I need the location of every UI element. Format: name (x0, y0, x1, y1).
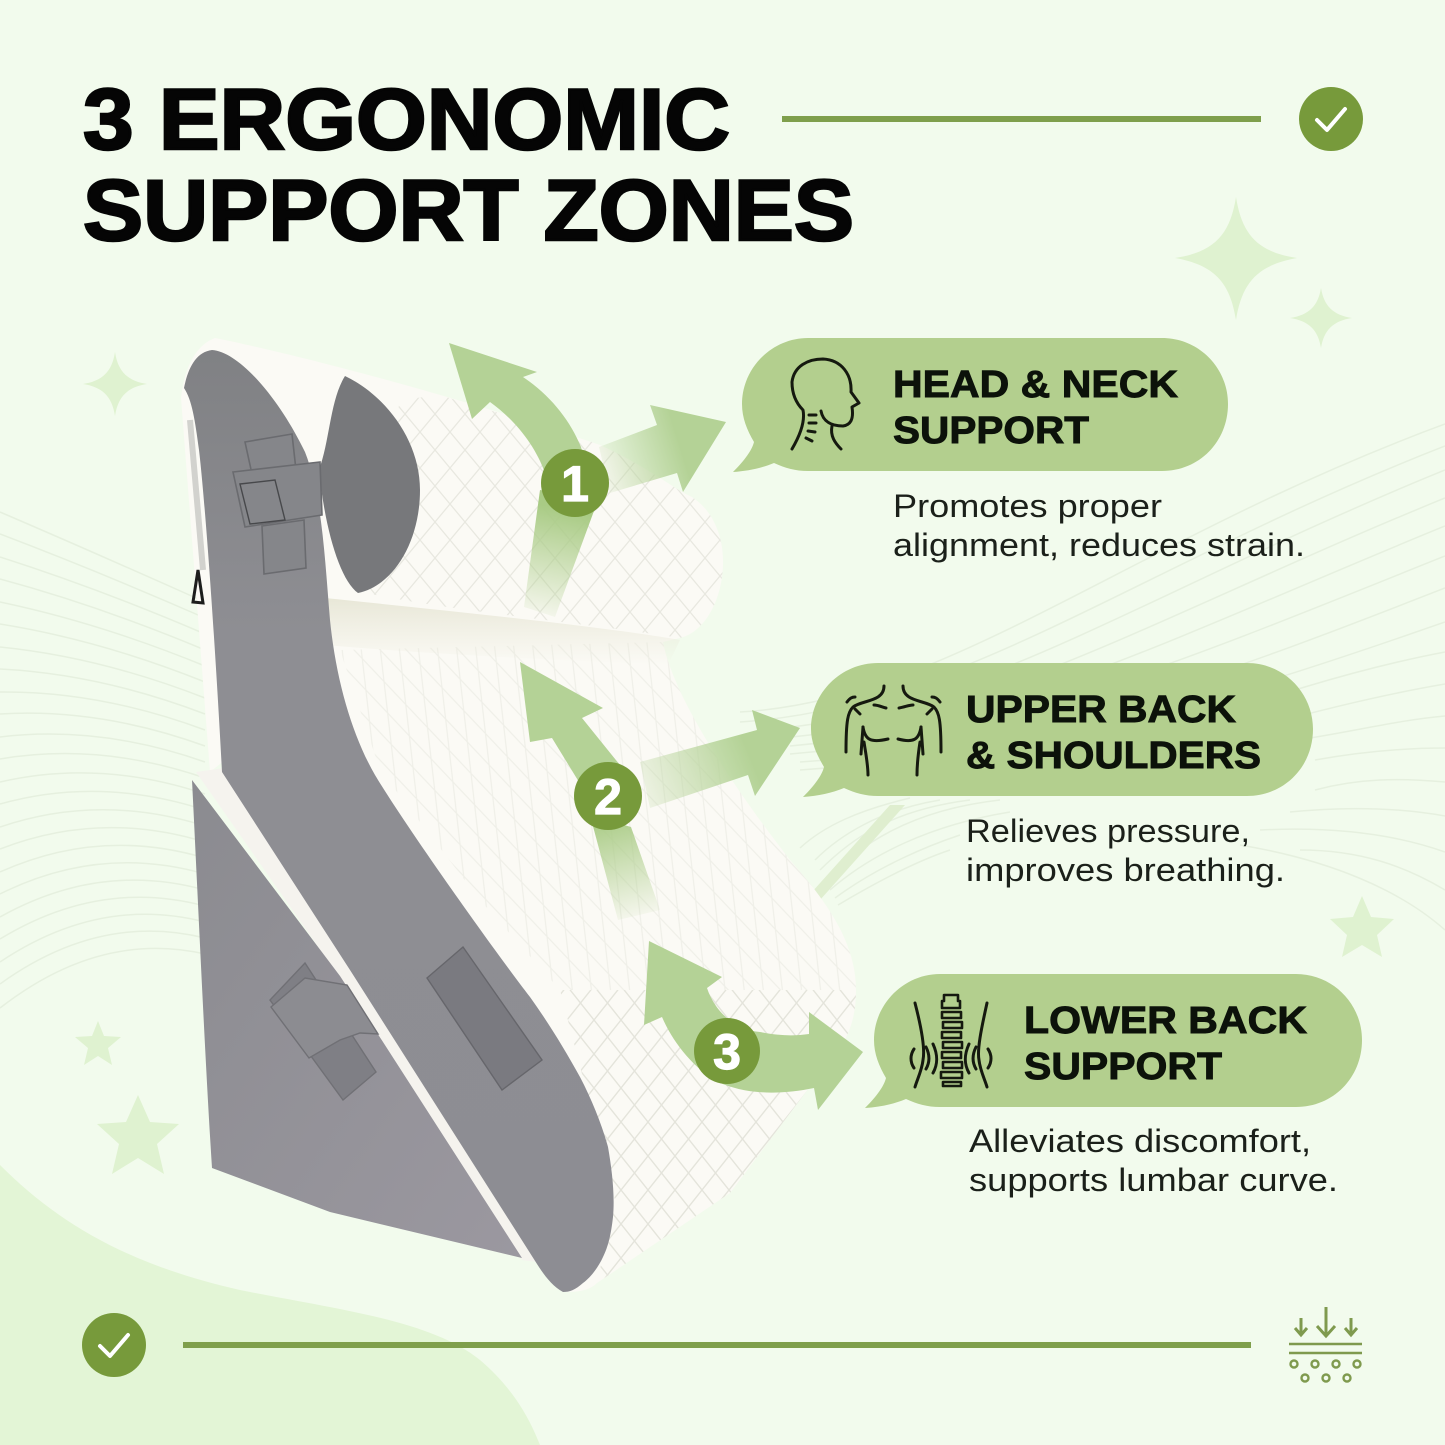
sparkle stars (75, 197, 1394, 1174)
callout: lower back: supports lumbar curve. (969, 1162, 1338, 1198)
arrow double 3 (644, 941, 863, 1110)
heading: HEAD & NECK (893, 364, 1179, 406)
callout: lower back (865, 974, 1362, 1198)
grey side panel (184, 350, 614, 1292)
wave line pattern (0, 424, 1445, 1008)
icon: spine (911, 995, 991, 1087)
arrow right 1 (599, 405, 726, 493)
callout: head and neck: SUPPORT (893, 410, 1089, 452)
quilted upper wedge (340, 642, 856, 990)
badge 2 (574, 762, 642, 830)
arrow tail 1 (524, 490, 598, 617)
arrows zone 2 (520, 662, 800, 920)
title: 3 ERGONOMIC (83, 72, 730, 168)
description: Promotes proper (893, 488, 1162, 524)
bottom divider with check badge (82, 1313, 1251, 1377)
callout: upper back: improves breathing. (966, 852, 1285, 888)
quilted lower wedge (560, 990, 856, 1283)
arrow tail 2 (590, 815, 660, 920)
zipper pull (193, 570, 203, 603)
badge 1: 1 (561, 456, 589, 512)
icon: shoulders (846, 686, 941, 775)
icon: pressure foam (1289, 1307, 1362, 1382)
top divider with check badge (782, 87, 1363, 151)
speech bubble 3 (865, 974, 1362, 1108)
shadow under bolster (325, 598, 680, 665)
upper strap (233, 434, 322, 574)
callout: upper back (803, 663, 1313, 888)
arrow right 2 (640, 710, 800, 808)
title: SUPPORT ZONES (83, 163, 854, 259)
badge 3: 3 (713, 1024, 741, 1080)
description: Alleviates discomfort, (969, 1123, 1311, 1159)
callout: head and neck (733, 338, 1305, 563)
speech bubble 1 (733, 338, 1228, 472)
speech bubble 2 (803, 663, 1313, 797)
callout: head and neck: alignment, reduces strain. (893, 527, 1305, 563)
title (83, 72, 854, 259)
velcro patch (427, 947, 542, 1090)
badge 2: 2 (594, 769, 622, 825)
pillow white silhouette (181, 338, 856, 1292)
heading: UPPER BACK (966, 689, 1237, 731)
arrow up-left 2 (520, 662, 632, 800)
description: Relieves pressure, (966, 813, 1250, 849)
product: support pillow (181, 338, 856, 1292)
bolster end cap (319, 376, 420, 593)
callout: upper back: & SHOULDERS (966, 735, 1261, 777)
badge 1 (541, 449, 609, 517)
side seam shading (190, 420, 203, 570)
background blob bottom left (0, 1165, 540, 1445)
heading: LOWER BACK (1024, 1000, 1308, 1042)
arrows zone 3 (644, 941, 863, 1110)
white piping base (196, 768, 537, 1262)
badge 3 (694, 1018, 760, 1084)
arrow up-left 1 (449, 343, 590, 480)
callout: lower back: SUPPORT (1024, 1046, 1222, 1088)
arrows zone 1 (449, 343, 726, 617)
quilted bolster (362, 395, 723, 638)
green streak behind pillow (812, 805, 905, 900)
lower strap (270, 963, 378, 1100)
grey wedge (192, 780, 522, 1258)
icon: head profile (792, 359, 859, 449)
